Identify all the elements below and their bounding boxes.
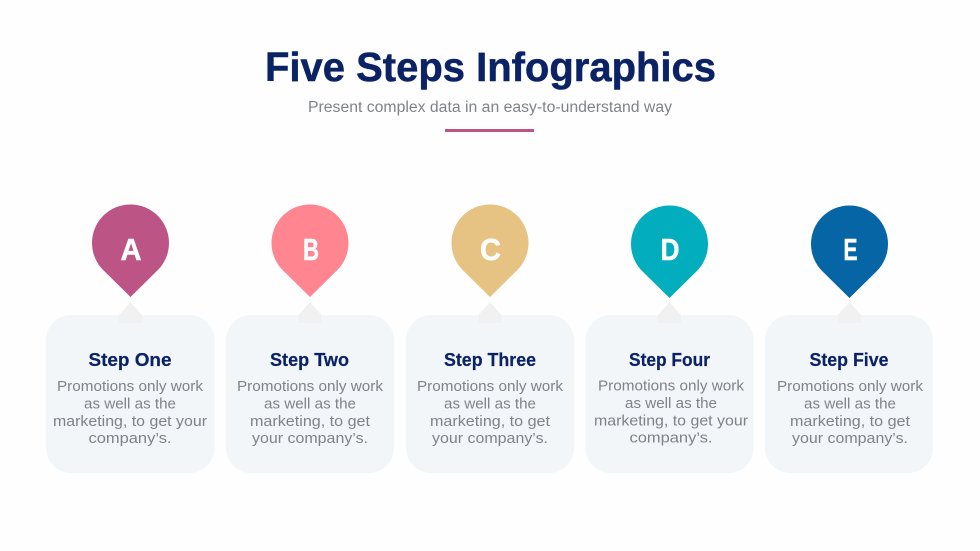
subtitle: Present complex data in an easy-to-understand way <box>308 99 672 116</box>
card body: your company’s. <box>432 430 548 447</box>
pin A: A <box>120 232 142 267</box>
pin A <box>92 204 169 297</box>
card heading: Step Two <box>270 350 349 370</box>
card body <box>417 378 564 447</box>
pin D <box>631 205 708 298</box>
card <box>226 315 394 473</box>
card body: company’s. <box>630 430 712 446</box>
card <box>586 315 754 473</box>
pin E: E <box>844 232 858 267</box>
card body: as well as the <box>444 396 536 412</box>
step four <box>586 205 754 473</box>
card body: Promotions only work <box>57 378 204 395</box>
pin C <box>452 204 528 297</box>
card heading: Step Four <box>629 350 710 370</box>
card body: as well as the <box>625 395 717 412</box>
pin B <box>271 204 348 297</box>
pin E <box>811 205 888 298</box>
card body: as well as the <box>264 396 356 412</box>
card body: as well as the <box>804 396 896 412</box>
step two <box>226 204 394 473</box>
card body: Promotions only work <box>237 378 384 395</box>
header <box>265 44 716 132</box>
card heading: Step Three <box>444 350 536 370</box>
card heading: Step One <box>88 350 172 370</box>
connector notch <box>658 302 681 323</box>
card body <box>594 378 748 446</box>
pin D: D <box>660 232 680 267</box>
title: Five Steps Infographics <box>265 44 716 90</box>
card body: marketing, to get <box>430 413 551 430</box>
card body: marketing, to get your <box>53 413 207 430</box>
card body: company’s. <box>88 430 172 447</box>
card body <box>777 378 924 447</box>
card body: marketing, to get <box>790 413 911 430</box>
connector notch <box>478 302 502 323</box>
connector notch <box>838 302 861 323</box>
connector notch <box>119 302 142 323</box>
card body: as well as the <box>84 396 176 412</box>
card body: your company’s. <box>252 430 368 447</box>
card body: marketing, to get your <box>594 412 748 430</box>
card body: your company’s. <box>792 430 908 447</box>
card <box>765 315 933 473</box>
step three <box>406 204 574 473</box>
card body: Promotions only work <box>598 378 745 394</box>
card body: marketing, to get <box>250 413 371 430</box>
card body <box>237 378 384 447</box>
card <box>46 315 214 473</box>
card body: Promotions only work <box>417 378 564 395</box>
connector notch <box>298 302 322 323</box>
pin B: B <box>303 232 319 267</box>
pin C: C <box>480 232 501 267</box>
card body: Promotions only work <box>777 378 924 395</box>
card <box>406 315 574 473</box>
step five <box>765 205 933 473</box>
accent rule <box>445 129 534 132</box>
card heading: Step Five <box>810 350 888 370</box>
step one <box>46 204 214 473</box>
card body <box>53 378 207 447</box>
